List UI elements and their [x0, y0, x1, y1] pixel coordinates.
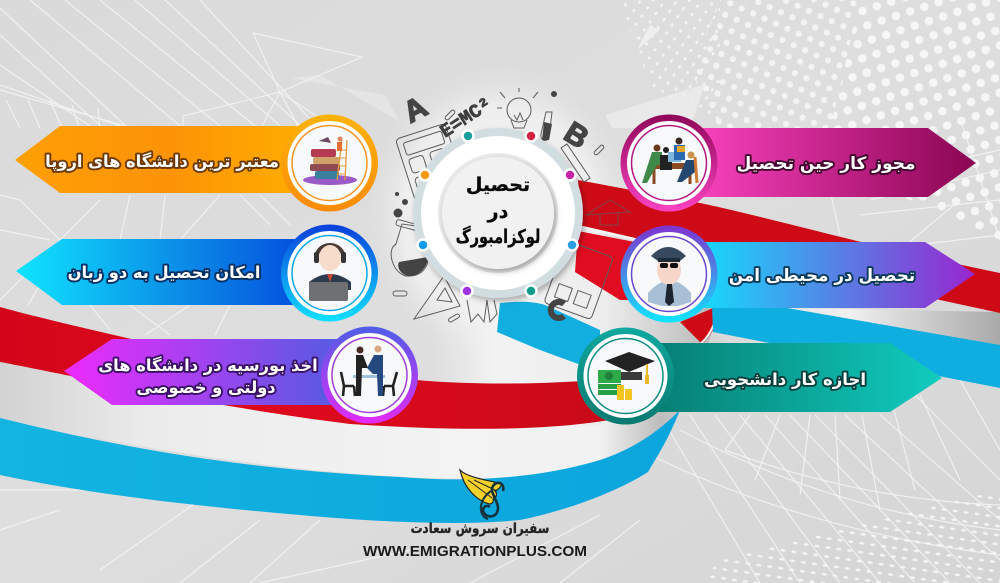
- icon: calculator left: [395, 123, 465, 202]
- arrow bar: [64, 339, 360, 405]
- panel: two language study: [16, 224, 378, 322]
- icon: letter A: A: [398, 90, 433, 130]
- icon: winged emblem: [460, 470, 503, 519]
- icon: team at a table: [642, 138, 697, 184]
- logo: [363, 470, 587, 560]
- ribbon: upper red stripe: [578, 180, 1000, 313]
- label: مجوز کار حین تحصیل: [736, 154, 916, 174]
- icon: stack of books: [303, 136, 357, 185]
- title: [456, 174, 540, 249]
- science doodles around the centre: [391, 88, 630, 323]
- icon: letter B: B: [558, 116, 594, 155]
- ribbon: white central fold: [430, 270, 720, 430]
- circle badge: [281, 114, 378, 212]
- icon: test tube: [541, 91, 557, 141]
- panel: most prestigious universities: [15, 114, 378, 212]
- ring dots: [418, 130, 578, 296]
- circle badge: [321, 326, 418, 424]
- ribbon: lower blue stripe: [0, 410, 680, 523]
- icon: light bulb: [497, 88, 538, 128]
- icon: calculator right: [544, 240, 613, 320]
- icon: set square: [414, 276, 460, 319]
- icon: formula: E=MC²: [436, 94, 496, 143]
- icon: graduation cap and money: [598, 352, 655, 400]
- label: اجازه کار دانشجویی: [704, 370, 866, 390]
- label: [98, 356, 318, 397]
- website: WWW.EMIGRATIONPLUS.COM: [363, 543, 587, 560]
- icon: pencil: [561, 144, 590, 182]
- circle badge: [620, 114, 718, 212]
- icon: medal ribbon: [467, 300, 497, 322]
- arrow bar: [15, 126, 320, 193]
- ribbon: lower red stripe: [0, 307, 620, 429]
- white ring: [421, 136, 575, 290]
- icon: handshake at a table: [341, 346, 397, 396]
- ribbon: second red fold: [575, 231, 720, 300]
- icon: police officer: [648, 247, 691, 306]
- title: لوکزامبورگ: [456, 225, 540, 249]
- circle badge: [281, 224, 378, 322]
- icon: headset operator: [309, 245, 351, 301]
- icon: letter C: [551, 302, 564, 318]
- panel: student work permit: [577, 328, 942, 424]
- title: تحصیل: [466, 174, 530, 196]
- icon: dots: [394, 192, 408, 218]
- label: تحصیل در محیطی امن: [729, 265, 915, 286]
- circle badge: [577, 328, 674, 424]
- panel: safe environment: [620, 226, 975, 322]
- icon: graduation cap doodle: [586, 200, 630, 225]
- arrow bar: [680, 242, 975, 308]
- label: اخذ بورسیه در دانشگاه های: [98, 356, 318, 375]
- inner disc: [438, 153, 558, 273]
- label: دولتی و خصوصی: [136, 378, 276, 397]
- arrow bar: [680, 128, 976, 197]
- panel: work permit during study: [620, 114, 976, 212]
- ribbon: red curl: [680, 306, 718, 344]
- circle badge: [620, 226, 718, 322]
- title: در: [487, 201, 509, 223]
- central badge: [413, 128, 583, 298]
- arrow bar: [16, 239, 320, 305]
- ribbon: upper blue stripe, right part: [712, 306, 1000, 388]
- label: امکان تحصیل به دو زبان: [68, 263, 260, 282]
- panel: scholarship: [64, 326, 418, 424]
- outer ring: [413, 128, 583, 298]
- arrow bar: [640, 343, 942, 412]
- company name: سفیران سروش سعادت: [411, 521, 549, 537]
- ribbon: white band under the red and blue stripes: [0, 308, 1000, 479]
- label: معتبر ترین دانشگاه های اروپا: [45, 152, 279, 172]
- icon: flask: [391, 219, 428, 276]
- ribbon: upper blue stripe, left part: [497, 302, 600, 372]
- icon: paper clips: [393, 109, 605, 323]
